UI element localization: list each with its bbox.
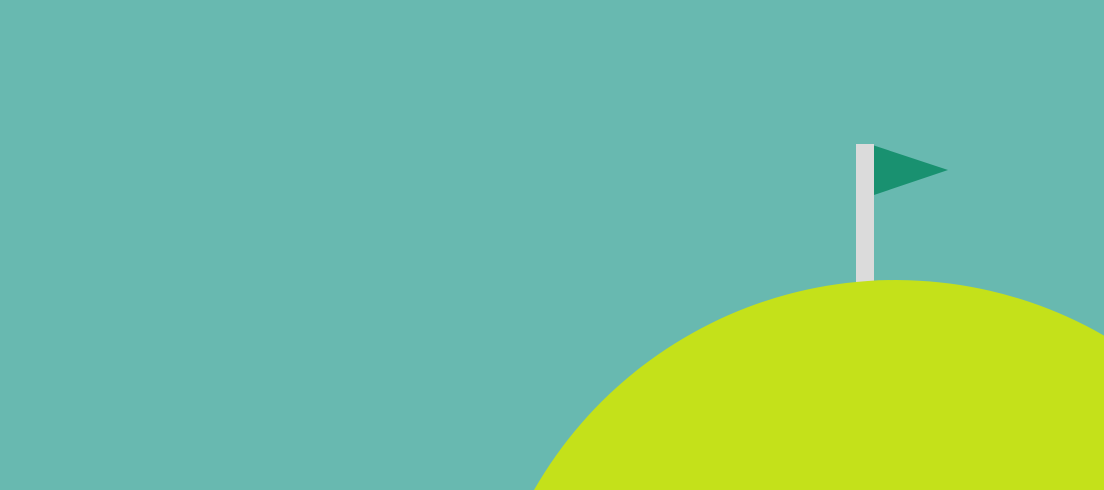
hill <box>534 280 1104 490</box>
flag pennant <box>874 146 948 195</box>
flag pole <box>856 144 874 286</box>
